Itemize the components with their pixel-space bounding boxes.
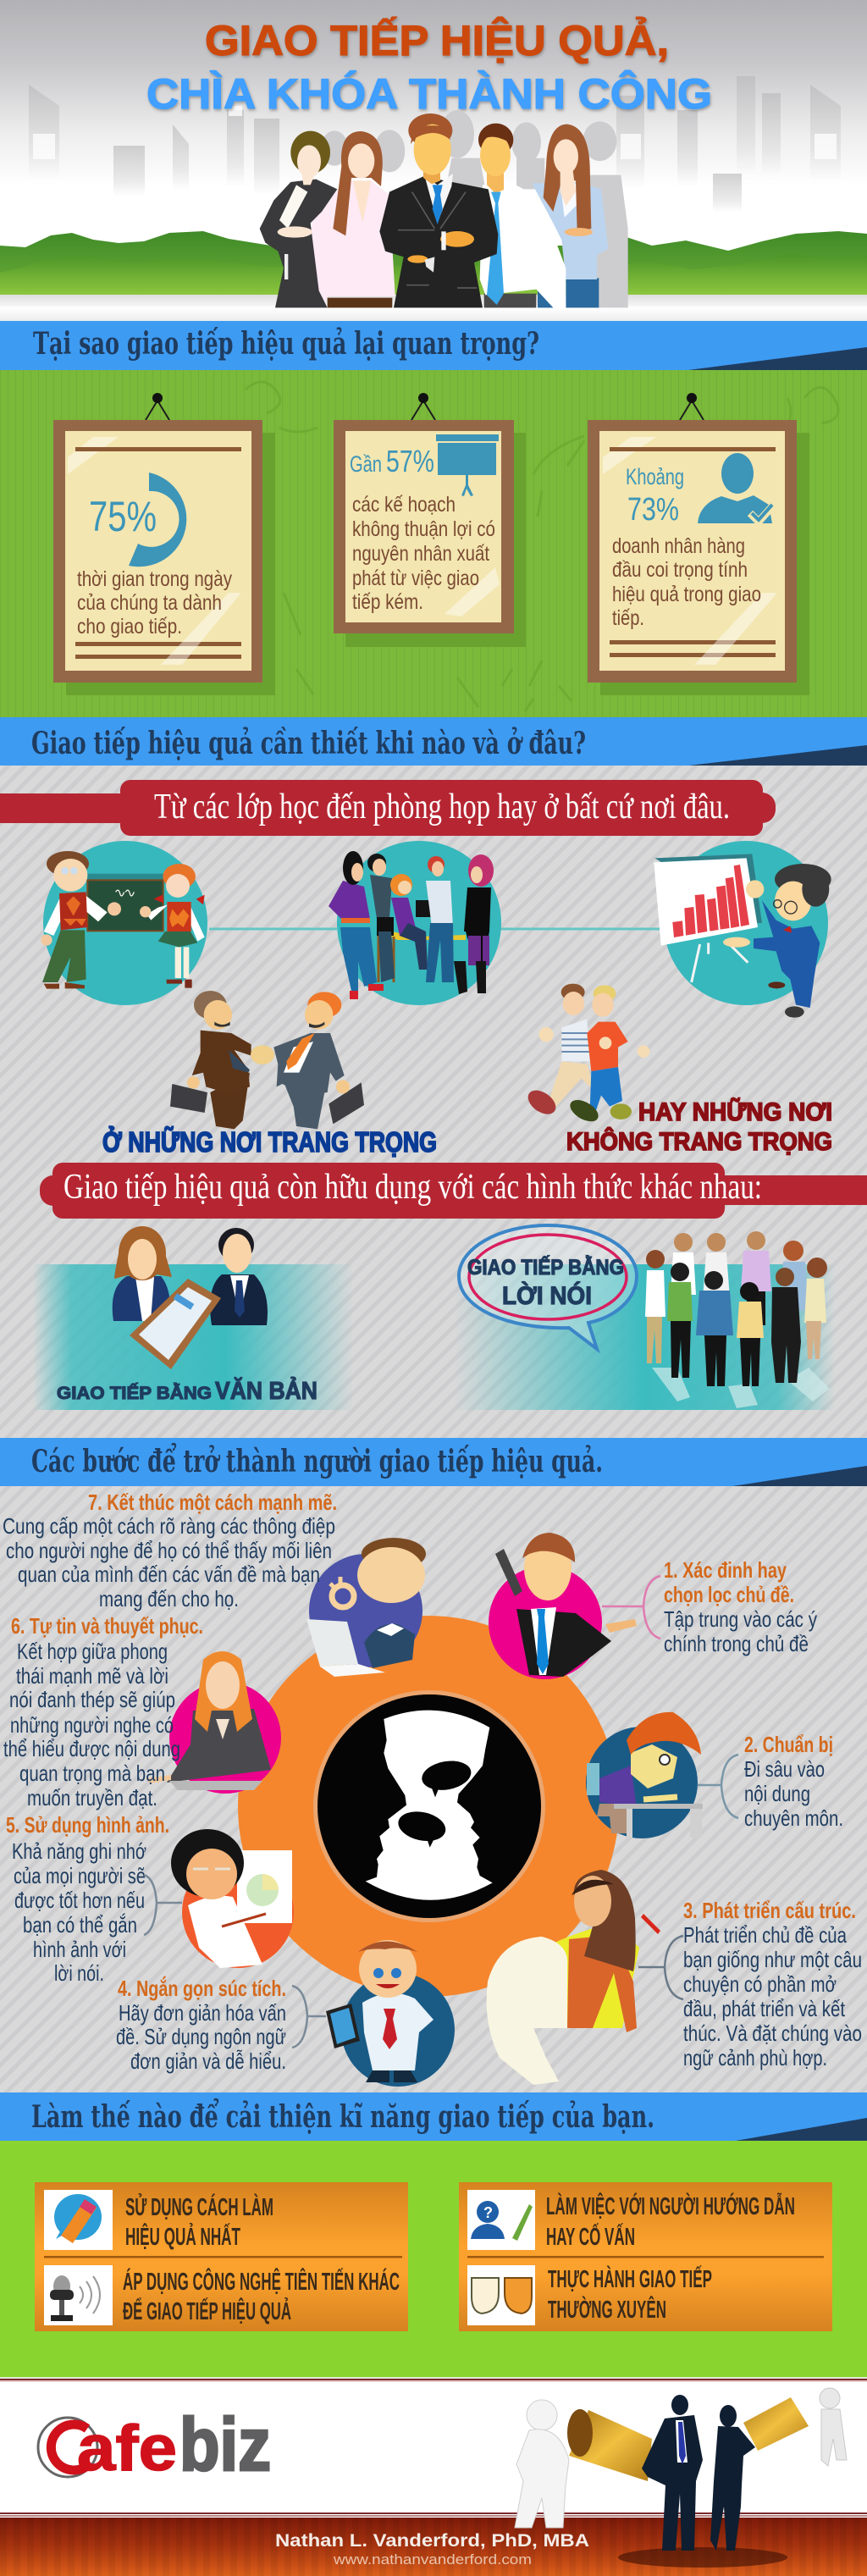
frame text: doanh nhân hàng bbox=[612, 534, 745, 558]
step 2: student writing at desk bbox=[586, 1712, 703, 1838]
illustration: people talking through tin cans bbox=[515, 2388, 847, 2568]
building windows bbox=[33, 106, 837, 159]
student: man in teal shirt bbox=[367, 854, 395, 982]
step 2: text: 2. Chuẩn bị bbox=[744, 1732, 833, 1757]
label: informal places: KHÔNG TRANG TRỌNG bbox=[566, 1127, 832, 1156]
frame text: các kế hoạch bbox=[352, 493, 456, 517]
icon: pencil and speech bubble bbox=[44, 2190, 113, 2250]
footer credit text: Nathan L. Vanderford, PhD, MBA bbox=[275, 2531, 589, 2551]
step 2: bracket connector bbox=[698, 1755, 738, 1818]
title bbox=[146, 17, 712, 118]
item text: THỰC HÀNH GIAO TIẾP bbox=[548, 2264, 712, 2293]
frame text: không thuận lợi có bbox=[352, 517, 495, 541]
title: GIAO TIẾP HIỆU QUẢ, bbox=[205, 17, 669, 64]
hanging frame 1: 75%: 75% bbox=[89, 493, 157, 540]
grey striped background: steps bbox=[0, 1486, 867, 2092]
title: CHÌA KHÓA THÀNH CÔNG bbox=[146, 69, 712, 118]
icon: two faces talking bbox=[467, 2265, 535, 2325]
item text bbox=[125, 2192, 273, 2251]
speech bubble: GIAO TIẾP BẰNG bbox=[467, 1255, 624, 1280]
speech bubble: LỜI NÓI bbox=[502, 1281, 592, 1310]
step 6: text bbox=[3, 1613, 203, 1810]
hanging frame 3: 73%: 73% bbox=[627, 492, 679, 528]
step 6: text: thái mạnh mẽ và lời bbox=[16, 1663, 168, 1689]
step 6: text: 6. Tự tin và thuyết phục. bbox=[11, 1613, 203, 1639]
teal circle: group of students bbox=[329, 841, 501, 1005]
frame text: cho giao tiếp. bbox=[77, 615, 182, 638]
item text bbox=[123, 2267, 400, 2325]
gold can left bbox=[567, 2409, 652, 2481]
hanging frame 2: 57%: Gần bbox=[350, 451, 382, 477]
white figure right bbox=[820, 2388, 847, 2466]
student: woman in black bbox=[454, 854, 494, 994]
orange central disc with two-faces emblem bbox=[238, 1616, 619, 1997]
section band 3 bbox=[0, 1438, 867, 1486]
item text: ÁP DỤNG CÔNG NGHỆ TIÊN TIẾN KHÁC bbox=[123, 2267, 400, 2296]
step 4: text: đề. Sử dụng ngôn ngữ bbox=[116, 2024, 286, 2049]
footer credit text: www.nathanvanderford.com bbox=[333, 2551, 532, 2568]
right briefcase bbox=[329, 1082, 364, 1124]
step 6: text: quan trọng mà bạn bbox=[19, 1761, 165, 1786]
frame text: thời gian trong ngày bbox=[77, 567, 232, 591]
step 5: text: lời nói. bbox=[54, 1960, 104, 1986]
step 6: text: Kết hợp giữa phong bbox=[17, 1639, 168, 1664]
step 6: text: nói đanh thép sẽ giúp bbox=[9, 1687, 175, 1712]
step 1: text bbox=[664, 1557, 817, 1656]
left briefcase bbox=[170, 1084, 207, 1113]
first woman bbox=[260, 131, 337, 307]
frame text: tiếp. bbox=[612, 606, 644, 630]
panel group: how to improve (green) bbox=[0, 2141, 867, 2377]
icon: mentor with question mark: ? bbox=[483, 2204, 493, 2221]
frame text bbox=[612, 534, 761, 630]
step 2: text bbox=[744, 1732, 843, 1831]
logo: CafeBiz: biz bbox=[179, 2402, 271, 2486]
front hill grass bbox=[0, 254, 867, 295]
caption: GIAO TIẾP BẰNG bbox=[57, 1383, 212, 1403]
girl pupil bbox=[140, 864, 205, 988]
speech bubble bbox=[459, 1225, 637, 1349]
step 5: woman with chart board bbox=[171, 1829, 294, 1968]
step 3: woman with long paper scroll bbox=[487, 1870, 660, 2085]
student: seated child bbox=[390, 874, 431, 970]
figure: business handshake bbox=[170, 991, 364, 1129]
step 2: text: nội dung bbox=[744, 1781, 810, 1806]
boy pupil bbox=[41, 851, 121, 989]
logo: CafeBiz bbox=[38, 2402, 271, 2486]
item text bbox=[548, 2264, 712, 2324]
connector line between circles bbox=[209, 928, 664, 930]
panel: written communication: VĂN BẢN bbox=[215, 1376, 318, 1405]
teal circle: classroom bbox=[41, 841, 207, 1005]
city skyline silhouette bbox=[29, 76, 841, 212]
back hill grass bbox=[0, 231, 867, 295]
step 2: text: Đi sâu vào bbox=[744, 1756, 825, 1782]
panel group: why communication matters (green) bbox=[0, 370, 867, 717]
step 7: text: mang đến cho họ. bbox=[99, 1586, 239, 1611]
hanging frame 2: 57%: 57% bbox=[386, 444, 434, 478]
step 1: bracket connector bbox=[602, 1576, 660, 1639]
section band 1 bbox=[0, 321, 867, 370]
step 5: text: được tốt hơn nếu bbox=[14, 1888, 145, 1913]
step 5: text: bạn có thể gắn bbox=[23, 1912, 137, 1938]
hanging frame 1: 75% bbox=[53, 393, 275, 695]
frame text: tiếp kém. bbox=[352, 590, 423, 614]
step 2: text: chuyên môn. bbox=[744, 1805, 843, 1831]
frame text: của chúng ta dành bbox=[77, 591, 222, 615]
centre man in black suit bbox=[379, 113, 498, 307]
label: informal places: HAY NHỮNG NƠI bbox=[638, 1097, 832, 1126]
icon: person with check bbox=[698, 453, 774, 523]
frame text: nguyên nhân xuất bbox=[352, 542, 489, 566]
frame text: đầu coi trọng tính bbox=[612, 558, 748, 582]
silhouette woman bbox=[710, 2405, 755, 2551]
frame text: hiệu quả trong giao bbox=[612, 583, 761, 606]
section band 2 bbox=[0, 717, 867, 766]
frame text: phát từ việc giao bbox=[352, 567, 479, 590]
hanging frame 3: 73%: Khoảng bbox=[626, 464, 684, 489]
illustration: team of five business people bbox=[260, 110, 628, 307]
chart board bbox=[654, 854, 762, 982]
figure: crowd of colleagues bbox=[645, 1231, 830, 1408]
step 7: man with laptop bbox=[306, 1538, 426, 1677]
silhouette man bbox=[642, 2395, 703, 2551]
step 6: woman at desk bbox=[146, 1651, 281, 1794]
icon: two faces with speech bubbles bbox=[366, 1711, 493, 1900]
panel: verbal communication bbox=[454, 1225, 835, 1410]
step 5: text bbox=[6, 1812, 169, 1986]
step 1: text: 1. Xác đinh hay bbox=[664, 1557, 787, 1583]
bench bbox=[378, 929, 466, 982]
step 4: text bbox=[116, 1976, 286, 2074]
item text: HIỆU QUẢ NHẤT bbox=[125, 2222, 240, 2251]
step 3: bracket connector bbox=[638, 1936, 683, 1999]
logo: CafeBiz: afe bbox=[77, 2413, 177, 2485]
footer background bbox=[0, 2377, 867, 2576]
step 7: text: cho người nghe để họ có thể thấy mối liên bbox=[6, 1538, 332, 1563]
item text bbox=[546, 2192, 795, 2251]
section heading: Các bước để trở thành người giao tiếp hiệu quả. bbox=[31, 1444, 603, 1479]
step 3: text bbox=[683, 1898, 862, 2070]
label: formal places: Ở NHỮNG NƠI TRANG TRỌNG bbox=[102, 1126, 437, 1158]
red banner: from classroom to meeting room bbox=[0, 780, 776, 836]
step 5: text: 5. Sử dụng hình ảnh. bbox=[6, 1812, 169, 1838]
second woman bbox=[306, 131, 395, 307]
road strip bbox=[0, 295, 867, 321]
hanging frame 2: 57% bbox=[334, 393, 526, 647]
item text: ĐỂ GIAO TIẾP HIỆU QUẢ bbox=[123, 2297, 291, 2325]
step 1: man with microphone bbox=[489, 1533, 637, 1679]
step 7: text: quan của mình đến các vấn đề mà bạn bbox=[18, 1562, 320, 1587]
step 7: text bbox=[3, 1490, 337, 1611]
red banner: other forms of communication bbox=[40, 1163, 867, 1219]
frame text bbox=[77, 567, 232, 638]
footer credit text bbox=[275, 2531, 589, 2568]
step 1: text: Tập trung vào các ý bbox=[664, 1606, 817, 1632]
item text: SỬ DỤNG CÁCH LÀM bbox=[125, 2192, 273, 2221]
frame text bbox=[352, 493, 495, 614]
icon: microphone with sound waves bbox=[44, 2265, 113, 2325]
presenter man bbox=[723, 864, 831, 1018]
item text: HAY CỐ VẤN bbox=[546, 2222, 635, 2251]
icon: two business people with clipboard bbox=[113, 1226, 268, 1369]
panel: written communication bbox=[33, 1226, 354, 1410]
step 4: man with tablet bbox=[326, 1940, 455, 2087]
item text: THƯỜNG XUYÊN bbox=[548, 2295, 666, 2324]
hanging frame 3: 73% bbox=[588, 393, 809, 695]
step 6: text: thể hiểu được nội dung bbox=[3, 1736, 180, 1761]
step 4: text: Hãy đơn giản hóa vấn bbox=[119, 2000, 286, 2026]
blackboard bbox=[87, 874, 163, 931]
student: man in white shirt bbox=[426, 856, 454, 982]
donut chart bbox=[129, 473, 186, 567]
step 7: text: Cung cấp một cách rõ ràng các thông điệp bbox=[3, 1513, 335, 1539]
step 5: text: của mọi người sẽ bbox=[14, 1863, 146, 1888]
grey striped background: where to communicate bbox=[0, 766, 867, 1438]
teal circle: presenter with chart bbox=[654, 841, 831, 1018]
header background scene bbox=[0, 0, 867, 321]
figure: two friends walking bbox=[523, 984, 649, 1125]
gold can right bbox=[743, 2397, 809, 2451]
step 5: text: Khả năng ghi nhớ bbox=[12, 1838, 146, 1864]
section heading: Giao tiếp hiệu quả cần thiết khi nào và ở đâu? bbox=[31, 726, 586, 761]
white figure left bbox=[515, 2400, 569, 2528]
step 4: text: 4. Ngắn gọn súc tích. bbox=[118, 1976, 286, 2001]
right woman bbox=[532, 124, 608, 307]
section band 4 bbox=[0, 2092, 867, 2141]
step 4 and 5 bracket connectors bbox=[144, 1875, 326, 2048]
step 3: text: ngữ cảnh phù hợp. bbox=[683, 2045, 827, 2070]
section heading: Tại sao giao tiếp hiệu quả lại quan trọng? bbox=[33, 326, 539, 362]
step 1: text: chọn lọc chủ đề. bbox=[664, 1582, 794, 1607]
step 7: text: 7. Kết thúc một cách mạnh mẽ. bbox=[88, 1490, 337, 1515]
orange box left bbox=[35, 2182, 408, 2331]
orange box right bbox=[459, 2182, 832, 2331]
student: woman in purple bbox=[329, 851, 384, 999]
label: informal places bbox=[566, 1097, 832, 1156]
icon: mentor with question mark bbox=[467, 2190, 535, 2250]
step 6: text: những người nghe có bbox=[10, 1712, 174, 1738]
step 1: text: chính trong chủ đề bbox=[664, 1631, 809, 1656]
step 4: text: đơn giản và dễ hiểu. bbox=[130, 2048, 286, 2074]
step 5: text: hình ảnh với bbox=[33, 1937, 126, 1962]
step 6: text: muốn truyền đạt. bbox=[27, 1785, 157, 1810]
icon: presentation board bbox=[436, 434, 499, 496]
right man bbox=[478, 124, 566, 307]
